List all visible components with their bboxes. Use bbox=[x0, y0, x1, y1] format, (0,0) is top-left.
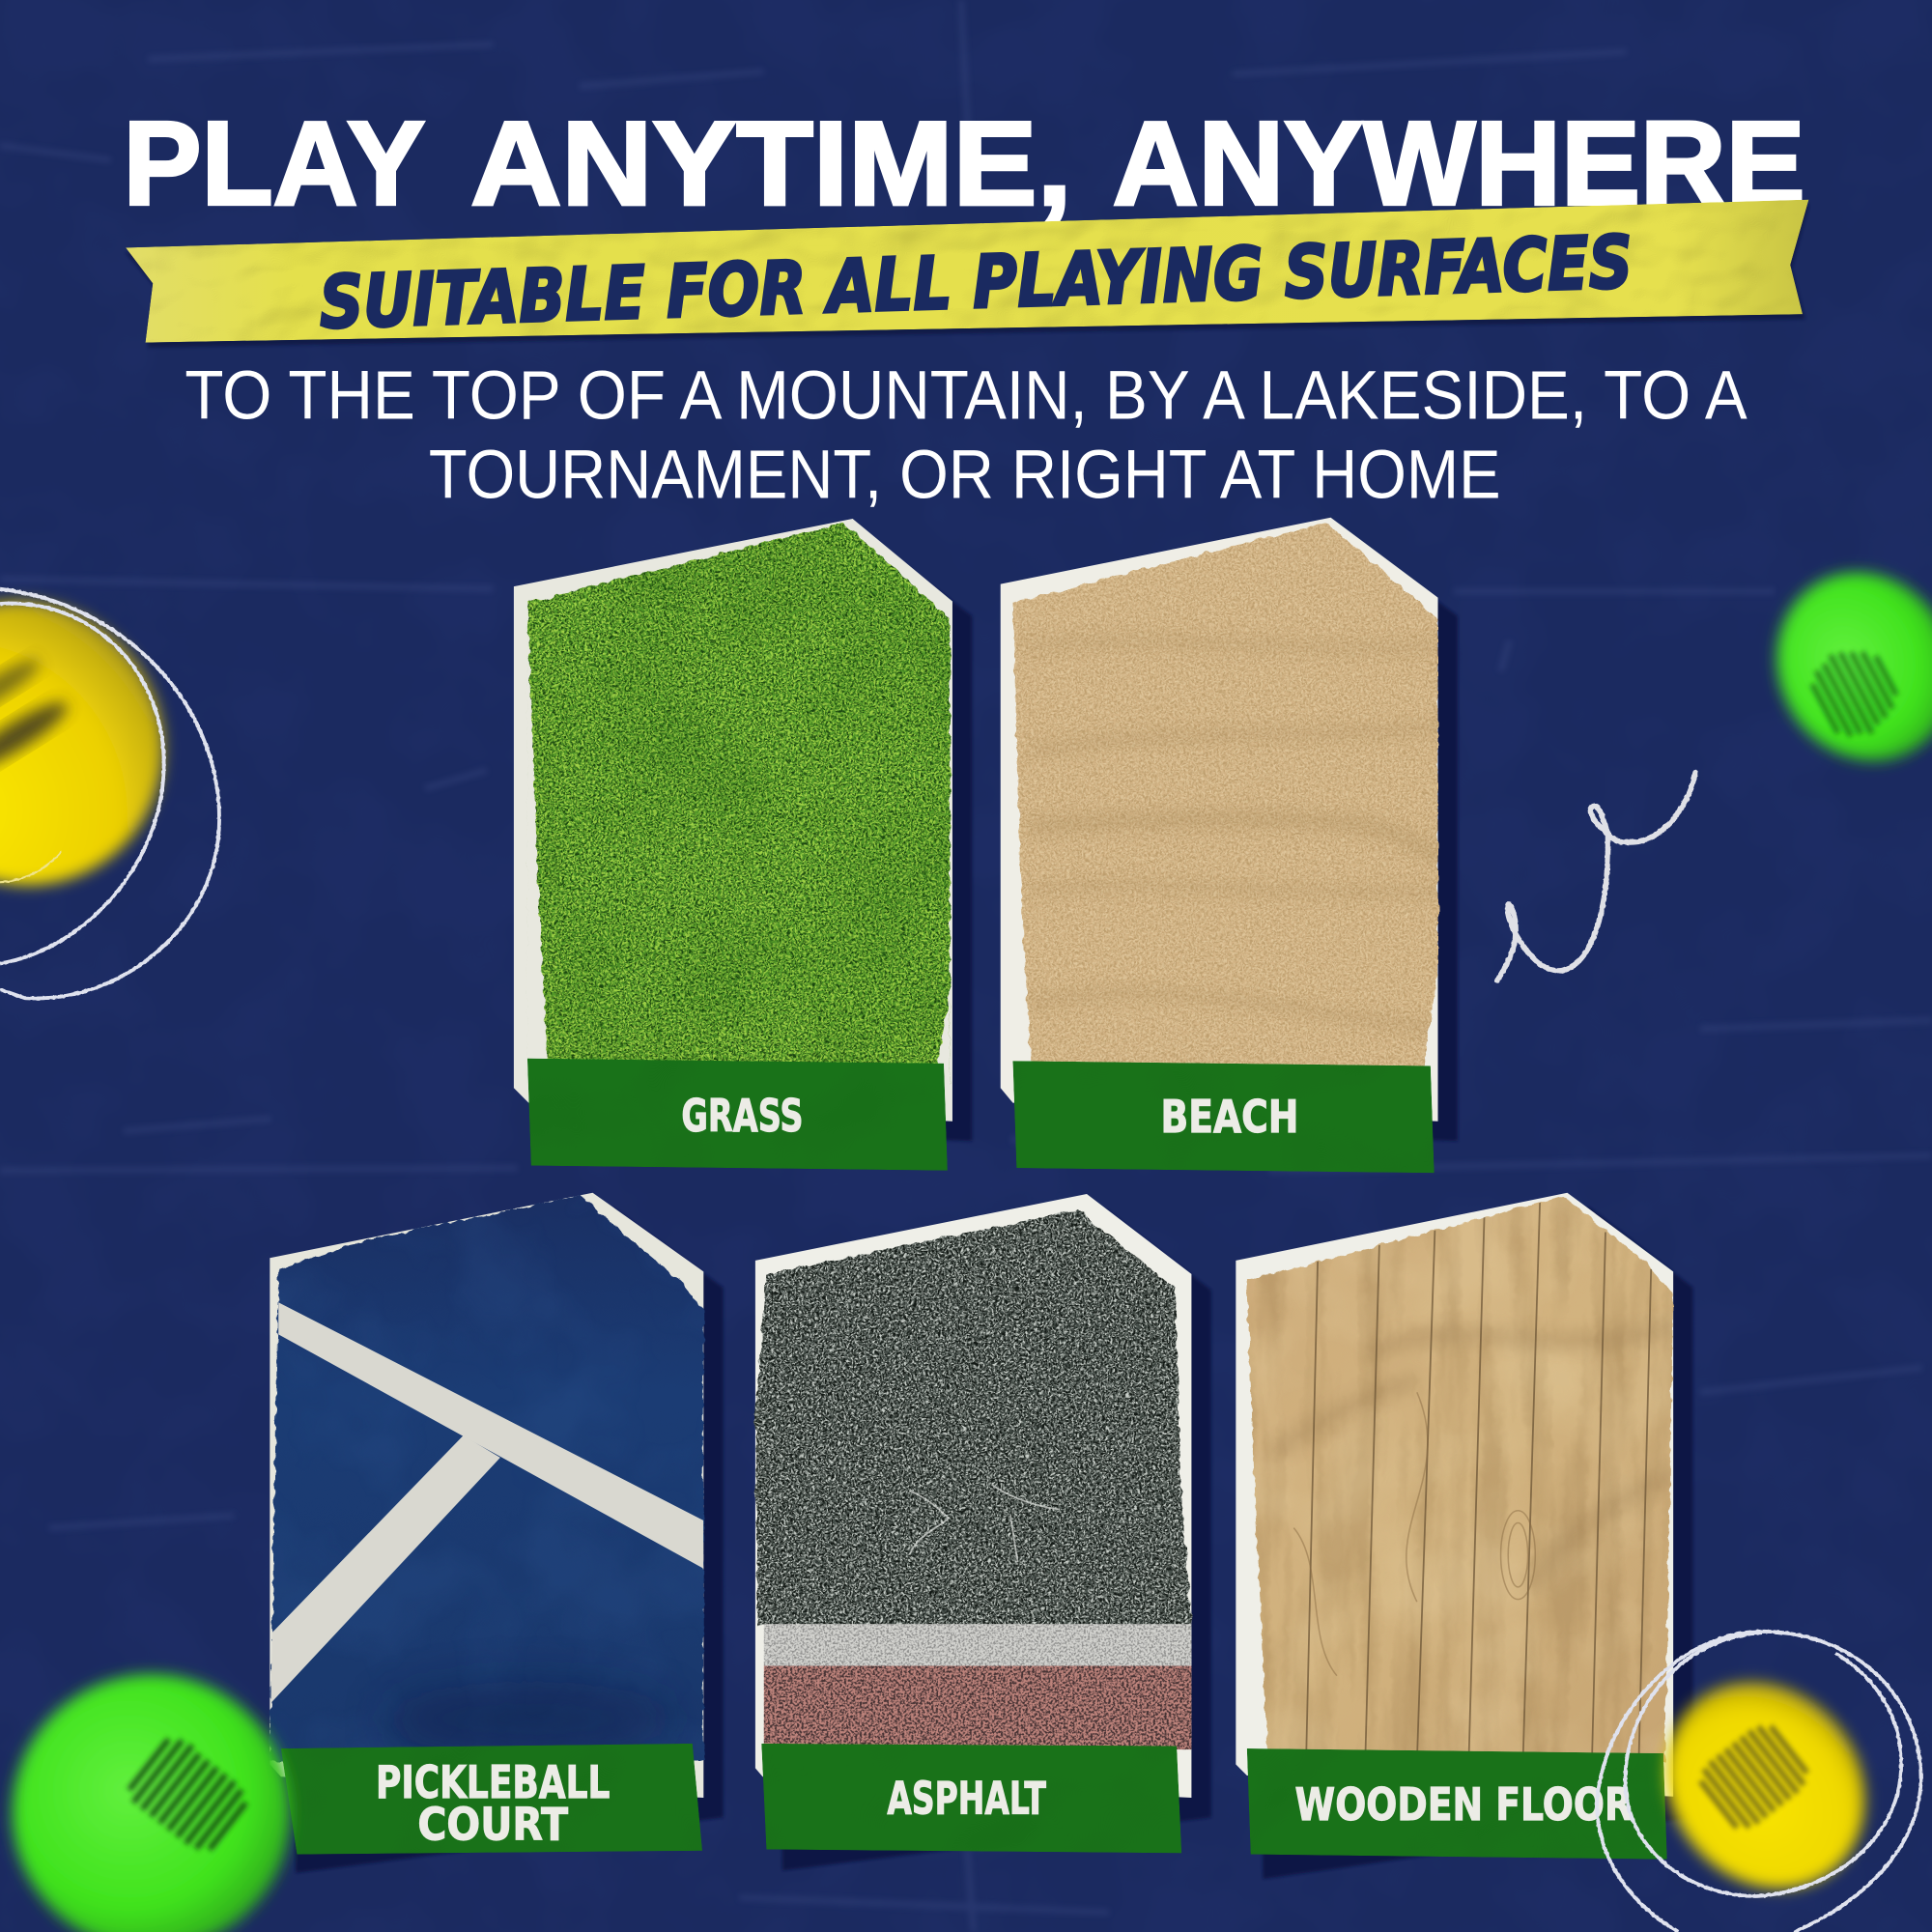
title: ANYTIME, bbox=[470, 98, 1072, 231]
court label: PICKLEBALL bbox=[376, 1756, 610, 1808]
icon: yellow ball bottom right bbox=[1625, 1642, 1906, 1928]
asphalt white and red bands bbox=[752, 1624, 1195, 1749]
asphalt cracks bbox=[909, 1485, 1060, 1562]
chalk rings bottom right bbox=[1597, 1632, 1921, 1932]
icon: yellow ball left bbox=[0, 555, 211, 931]
asphalt label bbox=[761, 1744, 1181, 1853]
icon: green ball top right bbox=[1745, 541, 1932, 792]
panel: pickleball court bbox=[265, 1193, 724, 1873]
wooden floor label bbox=[1247, 1748, 1667, 1860]
panel: beach bbox=[1001, 518, 1458, 1173]
panel: grass bbox=[514, 518, 972, 1171]
title bbox=[124, 98, 1805, 231]
chalk squiggle bbox=[1497, 773, 1695, 980]
court label: COURT bbox=[417, 1798, 569, 1850]
grass label bbox=[527, 1059, 948, 1171]
wood plank lines and knots bbox=[1293, 1193, 1651, 1762]
chalk rings left bbox=[0, 589, 219, 999]
grass texture bbox=[514, 518, 956, 1087]
sand texture bbox=[1005, 518, 1444, 1087]
subtitle text: TO THE TOP OF A MOUNTAIN, BY A LAKESIDE, TO A bbox=[185, 357, 1747, 435]
subtitle text bbox=[185, 357, 1747, 513]
wood surface bbox=[1238, 1193, 1677, 1766]
panel: wooden floor bbox=[1236, 1193, 1693, 1879]
court label bbox=[281, 1744, 702, 1855]
yellow ribbon banner bbox=[126, 200, 1808, 348]
subtitle text: TOURNAMENT, OR RIGHT AT HOME bbox=[429, 436, 1501, 513]
icon: green ball bottom left bbox=[13, 1674, 291, 1932]
title: PLAY bbox=[124, 98, 425, 231]
court white lines bbox=[270, 1302, 703, 1704]
beach label: BEACH bbox=[1161, 1091, 1298, 1143]
court surface bbox=[265, 1193, 708, 1766]
asphalt texture bbox=[752, 1195, 1195, 1627]
wooden floor label: WOODEN FLOOR bbox=[1295, 1778, 1633, 1831]
grass label: GRASS bbox=[681, 1090, 804, 1142]
panel: asphalt bbox=[752, 1194, 1211, 1870]
beach label bbox=[1012, 1061, 1435, 1173]
asphalt label: ASPHALT bbox=[887, 1773, 1046, 1825]
title: ANYWHERE bbox=[1113, 98, 1805, 231]
ribbon subtitle: SUITABLE FOR ALL PLAYING SURFACES bbox=[318, 219, 1634, 345]
